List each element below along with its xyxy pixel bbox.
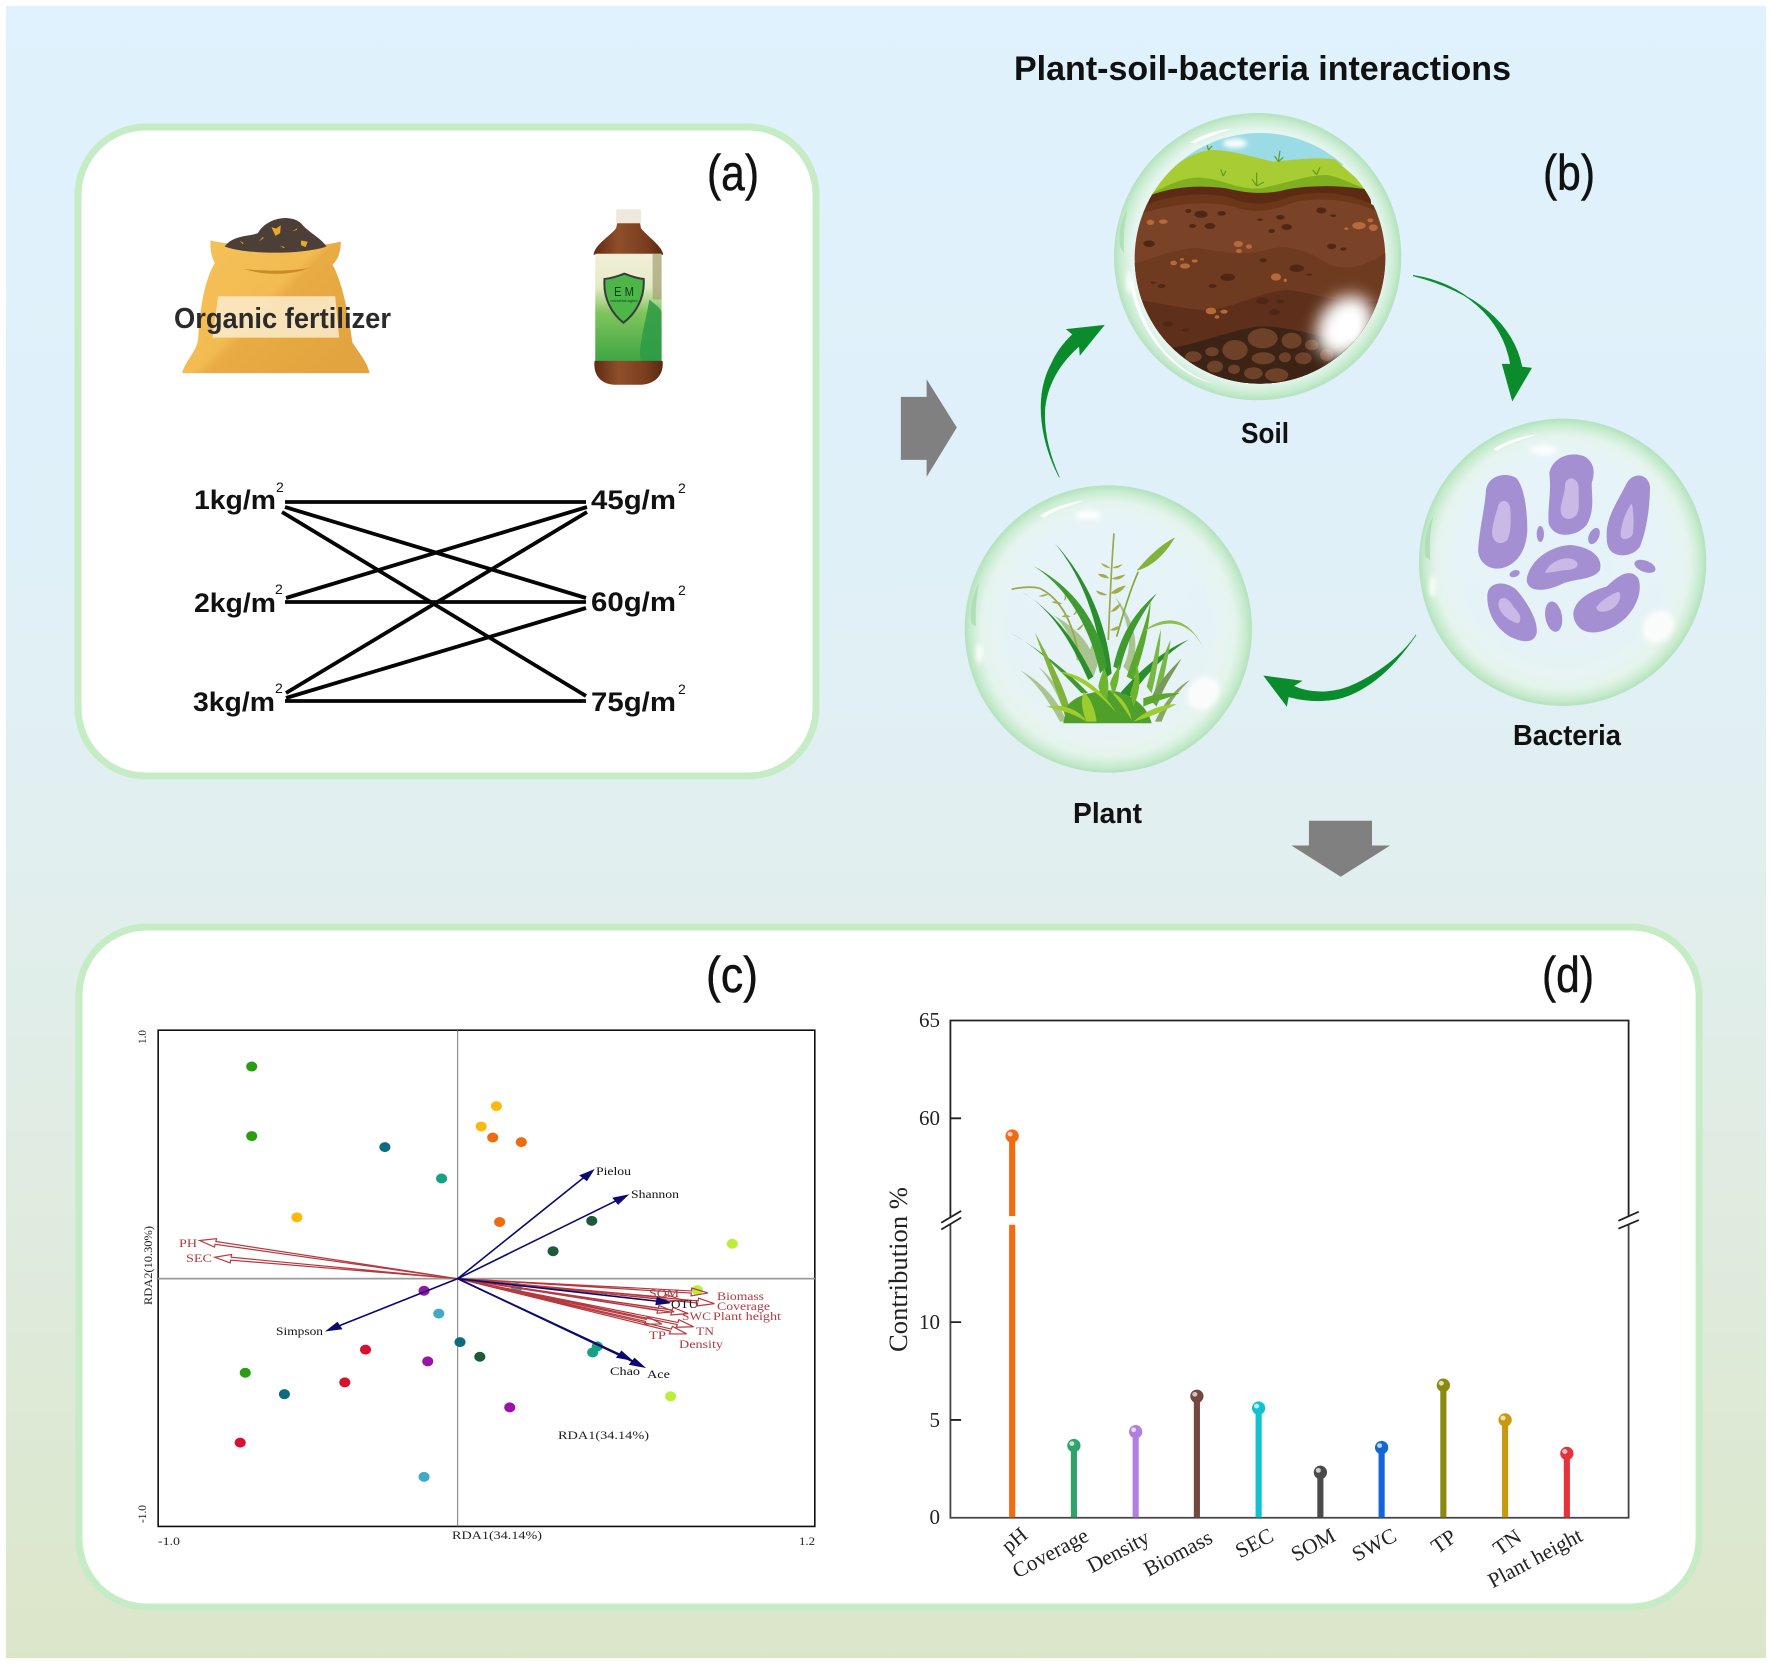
label (d): (d) (1542, 947, 1594, 1003)
x category labels: Density (1083, 1525, 1154, 1578)
icon: EM bottle: E M (614, 284, 634, 299)
diversity labels: Ace (647, 1367, 670, 1381)
arrow: panel b to bottom panels (1291, 821, 1390, 877)
x category labels: SEC (1231, 1523, 1277, 1563)
organic fertilizer rates: 2 (275, 581, 283, 597)
diversity labels (276, 1164, 698, 1381)
diversity labels: Chao (610, 1364, 640, 1378)
label: bacteria: Bacteria (1513, 720, 1622, 752)
organic fertilizer rates: 2 (276, 479, 284, 495)
chart: RDA biplot (135, 1030, 815, 1548)
lollipop bars (1006, 1129, 1573, 1517)
organic fertilizer rates: 2kg/m (194, 588, 276, 618)
axis labels: RDA1(34.14%) (452, 1528, 542, 1542)
environmental factor labels: SWC (682, 1309, 711, 1323)
arrow: bacteria to plant (1264, 635, 1416, 706)
environmental factor labels: Biomass (717, 1289, 764, 1303)
environmental factor labels: Density (679, 1337, 723, 1351)
EM agent rates: 2 (678, 480, 686, 496)
x category labels: SWC (1348, 1523, 1400, 1566)
y tick labels: 5 (930, 1408, 940, 1432)
title: Plant-soil-bacteria interactions (1014, 50, 1511, 88)
organic fertilizer rates: 3kg/m (193, 687, 275, 717)
axis labels: -1.0 (135, 1505, 149, 1523)
icon: EM bottle (594, 209, 663, 385)
environmental factor labels: Coverage (717, 1299, 770, 1313)
x category labels (997, 1522, 1586, 1593)
environmental factor labels: PH (179, 1236, 197, 1250)
x category labels: Biomass (1140, 1525, 1216, 1581)
x category labels: Plant height (1484, 1523, 1586, 1593)
environmental factor labels: TP (649, 1328, 666, 1342)
bubble: soil (1114, 113, 1401, 400)
panel: a fertilizer treatments (78, 127, 816, 776)
label (c): (c) (706, 947, 758, 1003)
environmental factor labels: Plant height (713, 1309, 782, 1323)
environmental factor labels: SEC (186, 1251, 212, 1265)
arrow: panel a to panel b (901, 379, 957, 477)
diversity labels: Simpson (276, 1324, 323, 1338)
y tick labels (919, 1008, 940, 1529)
y axis title: Contribution % (884, 1187, 913, 1352)
y tick labels: 60 (919, 1106, 940, 1130)
axis labels: RDA2(10.30%) (141, 1226, 155, 1305)
bubble: bacteria (1419, 419, 1706, 706)
text: organic fertilizer: Organic fertilizer (174, 303, 391, 335)
panel: c and d results (79, 927, 1699, 1607)
label: soil: Soil (1241, 418, 1289, 450)
label (b): (b) (1543, 145, 1595, 201)
label: plant: Plant (1073, 798, 1142, 830)
diversity labels: Shannon (631, 1187, 679, 1201)
x category labels: TN (1489, 1524, 1526, 1561)
organic fertilizer rates (193, 479, 284, 717)
environmental factor labels: SOM (649, 1286, 679, 1300)
arrow: plant to soil (1041, 325, 1104, 477)
panel: b interaction cycle (965, 113, 1706, 773)
axes frame (941, 1021, 1639, 1518)
axis labels: 1.2 (799, 1534, 815, 1548)
icon: fertilizer bag (182, 218, 370, 373)
EM agent rates: 60g/m (591, 587, 676, 617)
chart: contribution lollipop (884, 1008, 1639, 1593)
axis labels: -1.0 (158, 1534, 180, 1548)
environmental factor labels (179, 1236, 782, 1351)
organic fertilizer rates: 2 (275, 680, 283, 696)
arrow: soil to bacteria (1413, 276, 1531, 400)
y tick labels: 0 (930, 1505, 940, 1529)
bubble: plant (965, 485, 1252, 773)
label (a): (a) (707, 145, 759, 201)
EM agent rates: 2 (678, 582, 686, 598)
organic fertilizer rates: 1kg/m (194, 485, 276, 515)
EM agent rates (591, 480, 686, 717)
axis labels: 1.0 (135, 1030, 149, 1044)
y tick labels: 10 (919, 1310, 940, 1334)
sample points (235, 1062, 738, 1482)
treatment cross lines (282, 502, 587, 701)
axis labels (135, 1030, 815, 1548)
diversity labels: Pielou (596, 1164, 631, 1178)
axis labels: RDA1(34.14%) (558, 1428, 649, 1442)
EM agent rates: 75g/m (591, 687, 676, 717)
x category labels: pH (997, 1522, 1032, 1558)
EM agent rates: 45g/m (591, 485, 676, 515)
x category labels: TP (1427, 1524, 1461, 1558)
environmental factor labels: TN (696, 1324, 714, 1338)
icon: EM bottle: microbial agent (610, 298, 638, 303)
EM agent rates: 2 (678, 681, 686, 697)
icon: grass (1010, 533, 1203, 723)
x category labels: Coverage (1008, 1523, 1092, 1583)
diversity index arrows (328, 1171, 670, 1367)
y tick labels: 65 (919, 1008, 940, 1032)
x category labels: SOM (1287, 1523, 1339, 1566)
diversity labels: OTU (671, 1297, 698, 1311)
environmental factor arrows (200, 1239, 714, 1334)
